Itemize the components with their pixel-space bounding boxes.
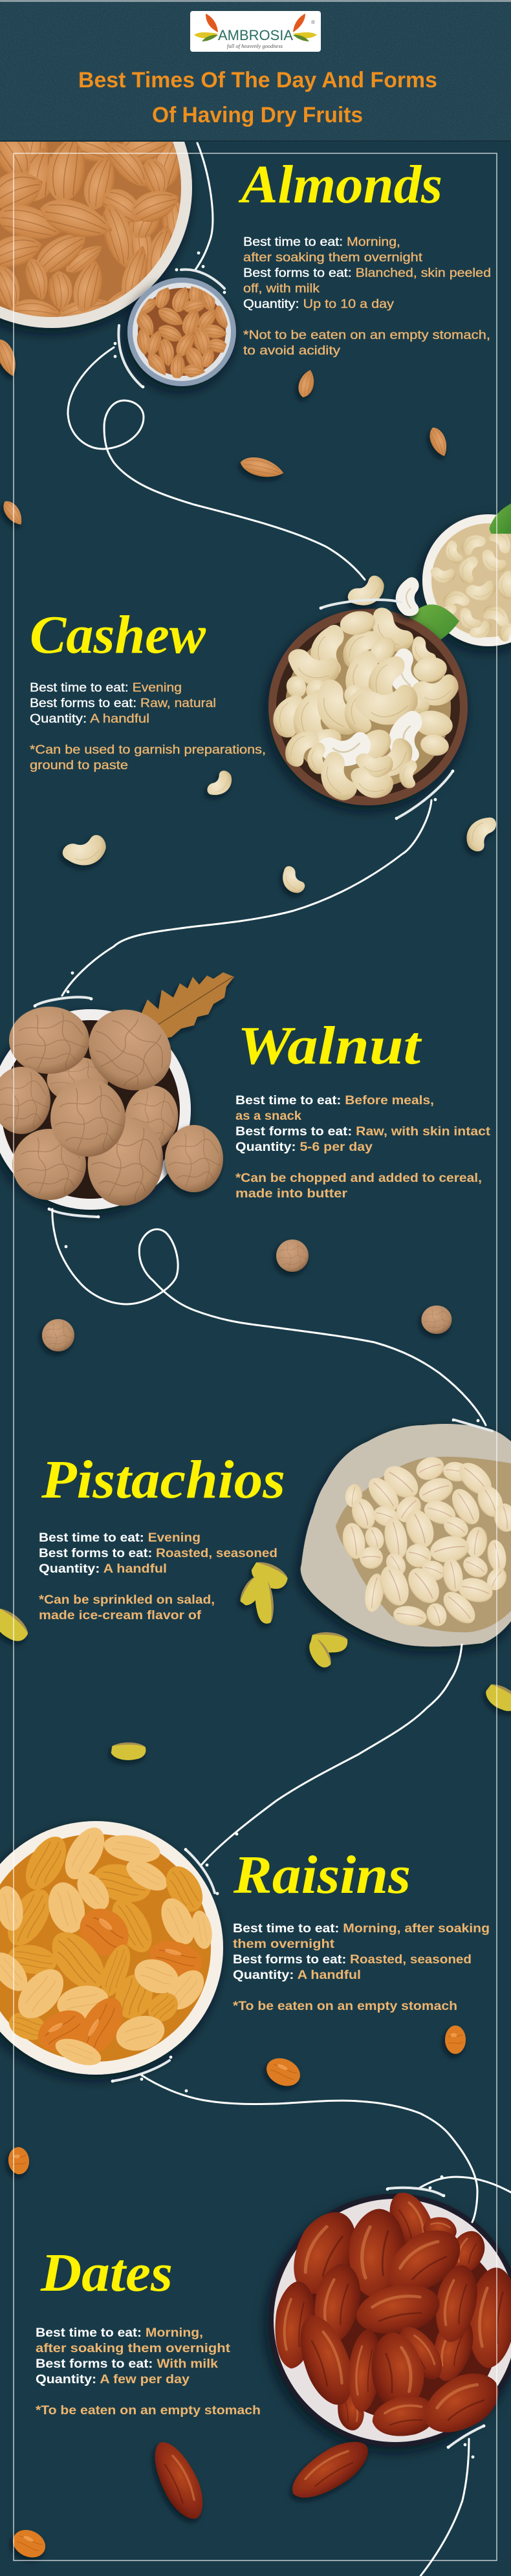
- text block: almonds facts: Best time to eat: Morning,: [243, 235, 400, 249]
- icon: white cashew bowl: [422, 514, 511, 646]
- text block: walnut facts: made into butter: [235, 1186, 347, 1201]
- text block: dates facts: [36, 2326, 261, 2418]
- text block: almonds facts: Quantity: Up to 10 a day: [243, 297, 394, 311]
- icon: oak leaf: [139, 972, 234, 1038]
- heading: Pistachios: Pistachios: [41, 1450, 285, 1510]
- icon: green leaves: [404, 503, 511, 648]
- text block: almonds facts: *Not to be eaten on an empty stomach,: [243, 328, 490, 342]
- text block: almonds facts: after soaking them overnight: [243, 250, 423, 265]
- text block: raisins facts: *To be eaten on an empty stomach: [233, 1999, 457, 2013]
- text block: dates facts: Best forms to eat: With milk: [36, 2357, 218, 2371]
- icon: whole walnut beside bowl: [165, 1125, 223, 1192]
- icon: loose raisins: [7, 2025, 466, 2562]
- text block: walnut facts: as a snack: [235, 1109, 301, 1123]
- title: Of Having Dry Fruits: [152, 103, 363, 127]
- icon: loose almonds: [0, 336, 451, 529]
- icon: loose walnuts: [42, 1239, 451, 1351]
- logo: full of heavenly goodness: [227, 43, 283, 49]
- icon: loose pistachio kernels: [0, 1558, 511, 1760]
- text block: raisins facts: Quantity: A handful: [233, 1968, 361, 1982]
- text block: pistachios facts: made ice-cream flavor of: [39, 1608, 202, 1622]
- text block: walnut facts: [235, 1093, 491, 1201]
- heading: Cashew: Cashew: [30, 605, 206, 665]
- panel: pistachios: [0, 1424, 511, 1760]
- text block: raisins facts: Best time to eat: Morning, after soaking: [233, 1921, 490, 1936]
- text block: almonds facts: Best forms to eat: Blanched, skin peeled: [243, 266, 491, 280]
- panel: almonds: [0, 142, 490, 529]
- text block: raisins facts: them overnight: [233, 1937, 335, 1951]
- text block: walnut facts: Best time to eat: Before meals,: [235, 1093, 434, 1108]
- text block: cashew facts: *Can be used to garnish preparations,: [30, 743, 266, 757]
- text block: cashew facts: [30, 681, 266, 772]
- icon: raisin bowl: [0, 1821, 223, 2075]
- text block: walnut facts: Quantity: 5-6 per day: [235, 1140, 373, 1154]
- title: Best Times Of The Day And Forms: [78, 68, 437, 93]
- panel: cashew: [30, 503, 511, 897]
- icon: large almond bowl: [0, 142, 195, 339]
- text block: almonds facts: off, with milk: [243, 281, 320, 296]
- text block: dates facts: Best time to eat: Morning,: [36, 2326, 203, 2340]
- logo: ®: [311, 19, 315, 25]
- text block: dates facts: Quantity: A few per day: [36, 2372, 190, 2386]
- heading: Dates: Dates: [40, 2243, 173, 2303]
- logo: AMBROSIA: [218, 27, 293, 43]
- text block: almonds facts: to avoid acidity: [243, 344, 340, 358]
- text block: almonds facts: [243, 235, 491, 358]
- text block: raisins facts: [233, 1921, 490, 2013]
- icon: loose dates: [144, 2430, 376, 2526]
- text block: pistachios facts: [39, 1531, 277, 1622]
- heading: Raisins: Raisins: [233, 1845, 411, 1905]
- icon: burlap sack of pistachios: [301, 1424, 511, 1646]
- text block: pistachios facts: Best time to eat: Evening: [39, 1531, 201, 1545]
- panel: raisins: [0, 1821, 490, 2562]
- text block: raisins facts: Best forms to eat: Roasted, seasoned: [233, 1952, 472, 1967]
- icon: wooden cashew bowl: [268, 606, 468, 807]
- icon: loose cashews: [60, 568, 497, 897]
- text block: pistachios facts: Quantity: A handful: [39, 1562, 167, 1576]
- decorative dots: [34, 252, 485, 2458]
- heading: Walnut: Walnut: [237, 1016, 422, 1076]
- panel: walnut: [0, 972, 491, 1351]
- text block: cashew facts: ground to paste: [30, 758, 128, 772]
- icon: small almond bowl: [127, 278, 236, 386]
- text block: pistachios facts: Best forms to eat: Roasted, seasoned: [39, 1546, 277, 1560]
- text block: dates facts: after soaking them overnight: [36, 2341, 231, 2355]
- title: [78, 68, 437, 127]
- header band: [0, 0, 511, 142]
- text block: cashew facts: Quantity: A handful: [30, 712, 149, 726]
- icon: date bowl: [268, 2185, 511, 2447]
- logo: [190, 11, 321, 52]
- text block: dates facts: *To be eaten on an empty stomach: [36, 2403, 261, 2418]
- text block: pistachios facts: *Can be sprinkled on salad,: [39, 1593, 215, 1607]
- text block: cashew facts: Best forms to eat: Raw, natural: [30, 696, 216, 710]
- heading: Almonds: Almonds: [238, 155, 442, 215]
- icon: walnut bowl: [0, 993, 191, 1212]
- text block: walnut facts: *Can be chopped and added to cereal,: [235, 1171, 482, 1185]
- text block: cashew facts: Best time to eat: Evening: [30, 681, 182, 695]
- text block: walnut facts: Best forms to eat: Raw, with skin intact: [235, 1124, 491, 1139]
- panel: dates: [36, 2185, 511, 2526]
